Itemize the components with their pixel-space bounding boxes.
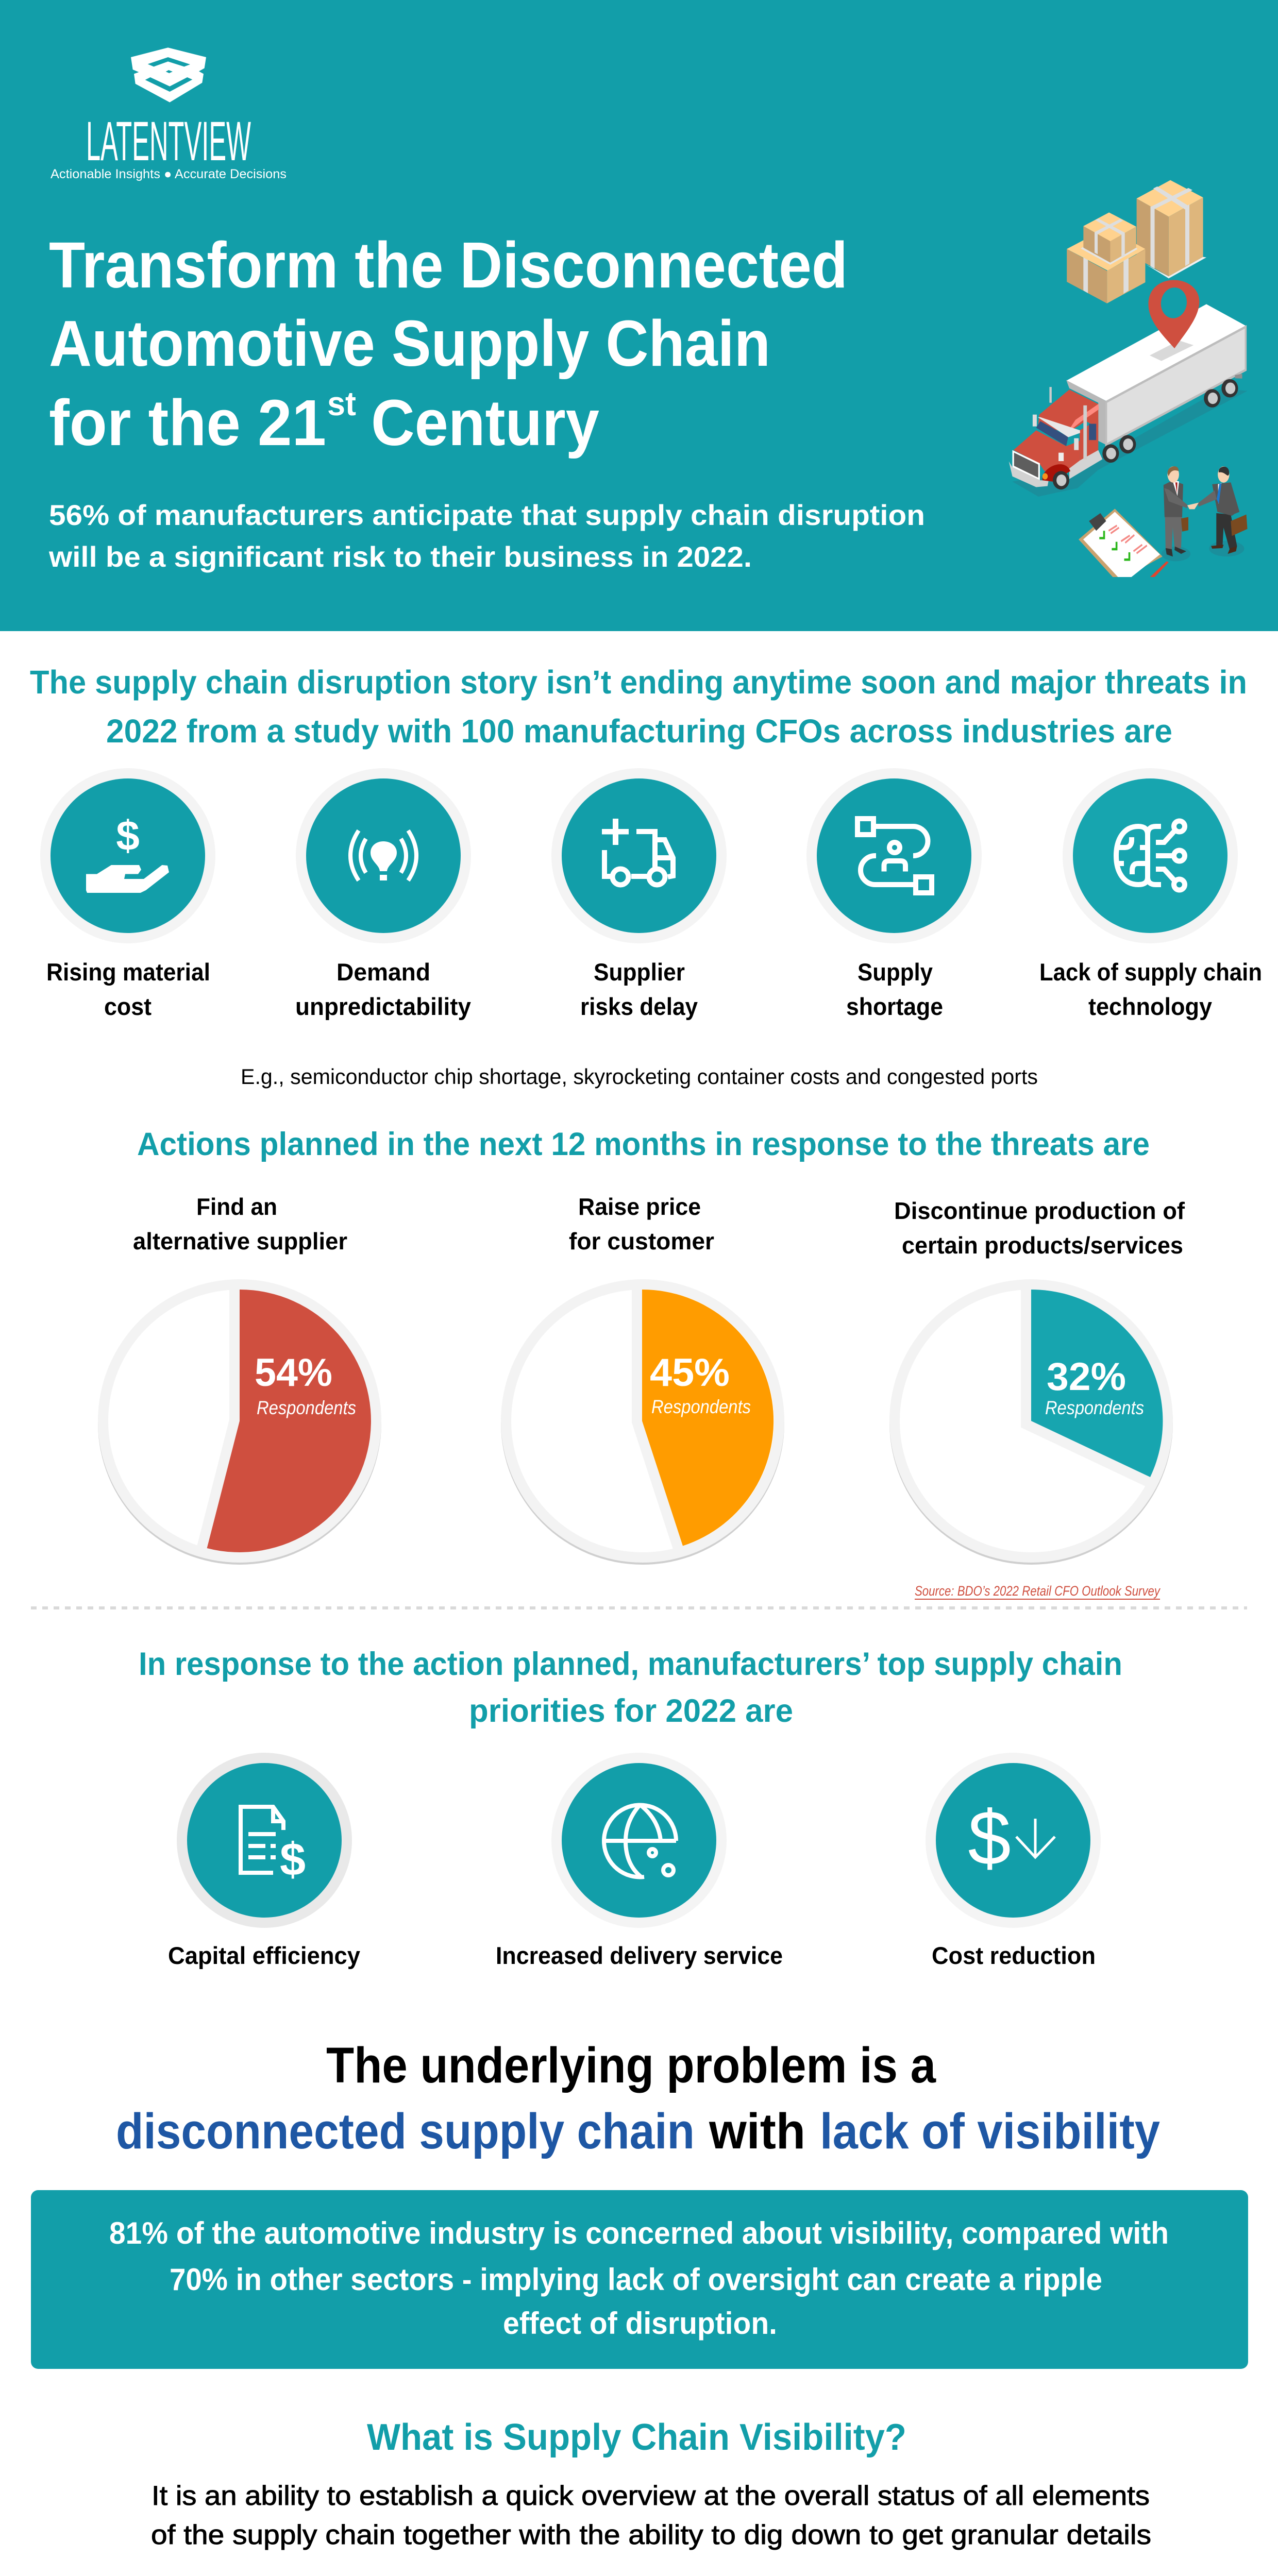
illustration: boxes, truck, handshake and checklist bbox=[1009, 180, 1248, 577]
label bbox=[569, 1193, 714, 1255]
title: Century bbox=[371, 386, 599, 459]
subheading: 56% of manufacturers: 56% of manufacturers anticipate that supply chain disruption bbox=[49, 499, 925, 531]
label: Increased delivery service bbox=[496, 1942, 783, 1969]
icon: document with dollar bbox=[241, 1807, 306, 1886]
label bbox=[46, 958, 210, 1020]
title bbox=[49, 229, 848, 459]
upper box bbox=[1083, 212, 1136, 263]
value: 32% bbox=[1047, 1355, 1126, 1399]
value: Respondents bbox=[1045, 1397, 1144, 1418]
label: certain products/services bbox=[902, 1232, 1183, 1259]
heading: underlying problem: with bbox=[709, 2103, 805, 2159]
businessmen shaking hands bbox=[1162, 466, 1248, 561]
wheels bbox=[1102, 379, 1238, 463]
pie chart: discontinue production 32% bbox=[889, 1197, 1185, 1565]
value: Respondents bbox=[257, 1397, 356, 1418]
label: Supplier bbox=[594, 958, 685, 986]
value bbox=[255, 1351, 356, 1418]
wordmark: LATENTVIEW bbox=[86, 111, 251, 172]
label: Cost reduction bbox=[932, 1942, 1096, 1969]
icon: bulb with signal waves bbox=[350, 831, 416, 880]
callout: 81% of the automotive industry: 70% in other sectors - implying lack of oversight can create a ripple bbox=[170, 2262, 1102, 2297]
heading: underlying problem: The underlying problem is a bbox=[326, 2037, 936, 2093]
label: for customer bbox=[569, 1228, 714, 1255]
label: alternative supplier bbox=[133, 1228, 347, 1255]
label: cost bbox=[104, 993, 152, 1020]
label: Find an bbox=[196, 1193, 277, 1220]
value bbox=[650, 1351, 751, 1417]
icon: route with person bbox=[857, 819, 932, 893]
title: Automotive Supply Chain bbox=[49, 307, 770, 380]
big box bbox=[1137, 180, 1206, 278]
threat: supply shortage bbox=[806, 768, 982, 1020]
priority: capital efficiency bbox=[168, 1753, 360, 1969]
threat: rising material cost bbox=[40, 768, 215, 1020]
text: definition: of the supply chain together with the ability to dig down to get granular details bbox=[151, 2520, 1151, 2550]
heading: underlying problem: disconnected supply chain bbox=[116, 2103, 695, 2159]
subheading: 56% of manufacturers: will be a significant risk to their business in 2022. bbox=[48, 540, 752, 573]
label: Lack of supply chain bbox=[1039, 958, 1262, 986]
label: technology bbox=[1088, 993, 1212, 1020]
label: Supply bbox=[857, 958, 933, 986]
priority: increased delivery service bbox=[496, 1753, 783, 1969]
lower box bbox=[1067, 228, 1145, 303]
threat: supplier risks delay bbox=[551, 768, 727, 1020]
source note: Source: BDO’s 2022 Retail CFO Outlook Survey bbox=[915, 1583, 1161, 1599]
icon: hand with dollar bbox=[86, 812, 169, 893]
label: unpredictability bbox=[295, 993, 471, 1020]
label bbox=[295, 958, 471, 1020]
truck ground shadow bbox=[1013, 388, 1248, 497]
icon: dollar with down arrow bbox=[968, 1794, 1055, 1881]
heading: disruption story: The supply chain disruption story isn’t ending anytime soon and major threats in bbox=[30, 664, 1247, 701]
callout: 81% of the automotive industry: 81% of the automotive industry is concerned about visibility, compared with bbox=[109, 2216, 1169, 2250]
label bbox=[846, 958, 943, 1020]
icon: logo mark bbox=[131, 47, 206, 103]
icon: location pin bbox=[1148, 280, 1199, 348]
trailer bbox=[1066, 304, 1246, 445]
title: Transform the Disconnected bbox=[49, 229, 848, 301]
label: risks delay bbox=[580, 993, 698, 1020]
panel: header bbox=[0, 0, 1278, 631]
icon: hand with dollar: $ bbox=[116, 812, 140, 859]
label: Discontinue production of bbox=[894, 1197, 1185, 1224]
priority: cost reduction bbox=[926, 1753, 1101, 1969]
heading: what is supply chain visibility: What is Supply Chain Visibility? bbox=[367, 2417, 906, 2458]
text: definition bbox=[151, 2481, 1151, 2550]
panel: major threats bbox=[30, 664, 1262, 1089]
pencil bbox=[1150, 561, 1169, 577]
tagline: Actionable Insights ● Accurate Decisions bbox=[51, 167, 287, 181]
label: Rising material bbox=[46, 958, 210, 986]
heading: underlying problem: lack of visibility bbox=[820, 2103, 1160, 2159]
text: definition: It is an ability to establish a quick overview at the overall status of all elements bbox=[152, 2481, 1150, 2511]
pie chart: raise price 45% bbox=[501, 1193, 784, 1565]
icon: circuit brain bbox=[1116, 821, 1185, 890]
title: st bbox=[327, 384, 356, 422]
icon: globe with pin bbox=[604, 1805, 676, 1877]
heading: disruption story bbox=[30, 664, 1247, 750]
heading: top priorities: In response to the action planned, manufacturers’ top supply chain bbox=[139, 1646, 1122, 1682]
threat: demand unpredictability bbox=[295, 768, 471, 1020]
label: Capital efficiency bbox=[168, 1942, 360, 1969]
value: Respondents bbox=[651, 1396, 751, 1417]
callout: 81% of the automotive industry bbox=[31, 2190, 1248, 2369]
clipboard checklist bbox=[1079, 509, 1163, 577]
panel: actions planned bbox=[98, 1126, 1185, 1599]
panel: top priorities bbox=[139, 1646, 1122, 1969]
label bbox=[894, 1197, 1185, 1259]
value: 54% bbox=[255, 1351, 332, 1395]
heading: top priorities: priorities for 2022 are bbox=[469, 1693, 793, 1729]
icon: document with dollar: $ bbox=[280, 1834, 306, 1886]
note: examples: E.g., semiconductor chip shortage, skyrocketing container costs and congested ports bbox=[241, 1064, 1038, 1089]
truck cab bbox=[1009, 387, 1102, 489]
logo: LatentView bbox=[51, 47, 287, 181]
label bbox=[133, 1193, 347, 1255]
threat: lack of supply chain technology bbox=[1039, 768, 1262, 1020]
subheading: 56% of manufacturers bbox=[48, 499, 925, 573]
heading: top priorities bbox=[139, 1646, 1122, 1729]
value: 45% bbox=[650, 1351, 730, 1395]
label: shortage bbox=[846, 993, 943, 1020]
icon: dollar with down arrow: $ bbox=[968, 1794, 1011, 1881]
heading: disruption story: 2022 from a study with 100 manufacturing CFOs across industries are bbox=[106, 713, 1172, 750]
callout: 81% of the automotive industry: effect of disruption. bbox=[503, 2306, 777, 2341]
label bbox=[1039, 958, 1262, 1020]
label bbox=[580, 958, 698, 1020]
icon: delivery truck with plus bbox=[602, 819, 673, 885]
value bbox=[1045, 1355, 1144, 1418]
heading: actions planned: Actions planned in the next 12 months in response to the threats are bbox=[137, 1126, 1150, 1162]
panel: underlying problem bbox=[31, 2037, 1248, 2550]
pie chart: alternative supplier 54% bbox=[98, 1193, 381, 1565]
title: for the 21 bbox=[49, 386, 326, 459]
heading: underlying problem bbox=[116, 2037, 1160, 2159]
label: Demand bbox=[337, 958, 430, 986]
label: Raise price bbox=[578, 1193, 701, 1220]
